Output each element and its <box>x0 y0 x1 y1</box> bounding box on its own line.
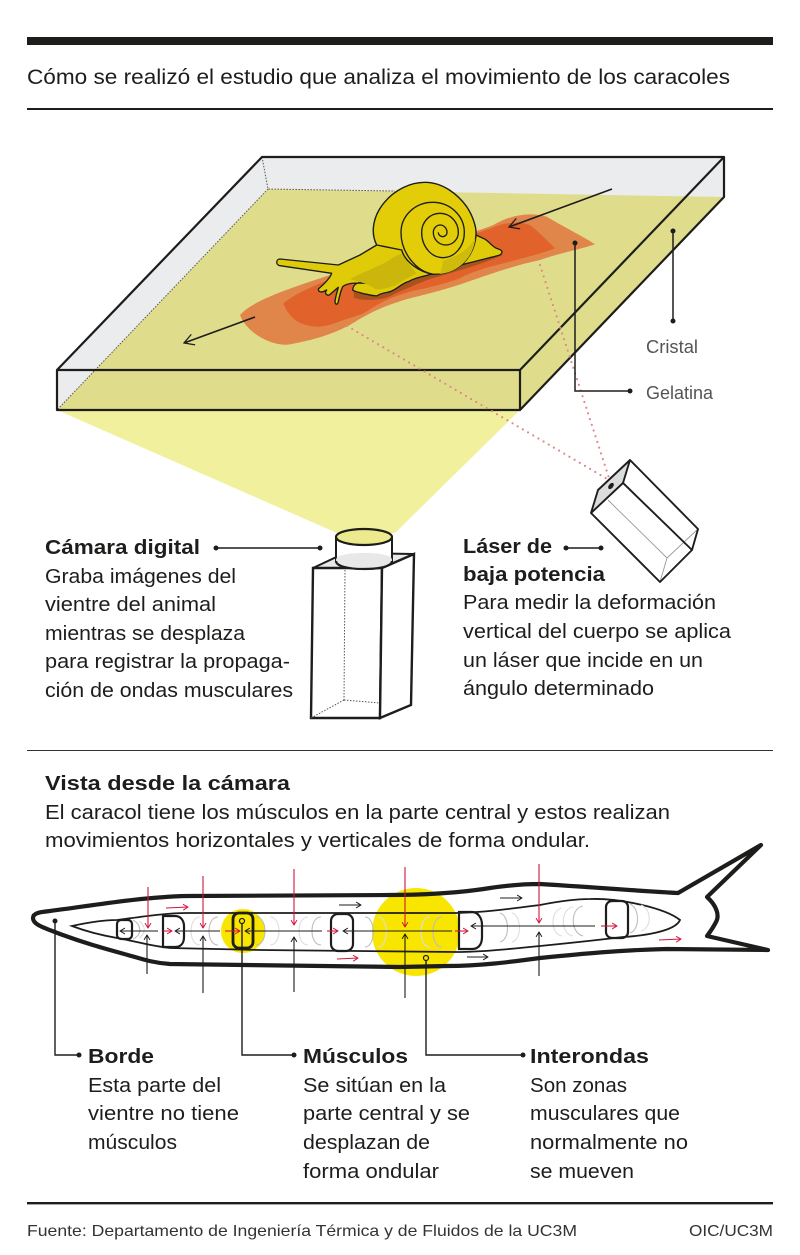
text: músculos: forma ondular <box>303 1161 439 1183</box>
label: cristal: Cristal <box>646 337 698 357</box>
shell <box>373 182 476 274</box>
icon: digital camera <box>311 529 414 718</box>
trail outer <box>240 214 595 345</box>
text: láser: ángulo determinado <box>463 678 654 700</box>
text: borde: Esta parte del <box>88 1075 221 1097</box>
text: cámara digital <box>45 537 293 702</box>
snail <box>277 182 503 304</box>
text: interondas: normalmente no <box>530 1132 688 1154</box>
leader: cristal <box>670 228 676 324</box>
text: láser: Láser de <box>463 536 552 558</box>
muscles <box>117 901 628 951</box>
glass box with gelatin <box>57 157 724 410</box>
central muscle band <box>72 899 680 952</box>
laser dotted beams <box>347 265 609 480</box>
text: láser: Para medir la deformación <box>463 592 716 614</box>
body <box>277 235 502 304</box>
leader: borde <box>52 918 82 1058</box>
leader: interondas <box>424 956 526 1058</box>
yellow highlights <box>221 888 460 976</box>
shadow under the foot <box>353 255 503 300</box>
source: Fuente: Departamento de Ingeniería Térmica y de Fluidos de la UC3M <box>27 1223 577 1240</box>
movement arrows <box>184 189 612 343</box>
heading: vista desde la cámara <box>45 773 670 852</box>
deformation trail <box>240 214 595 345</box>
leader: láser <box>564 546 604 550</box>
text: láser <box>463 536 732 700</box>
text: músculos <box>303 1046 470 1183</box>
text: láser: un láser que incide en un <box>463 650 703 672</box>
text: borde: Borde <box>88 1046 154 1068</box>
text: borde: vientre no tiene <box>88 1103 239 1125</box>
text: cámara digital: mientras se desplaza <box>45 623 246 645</box>
text: interondas: Son zonas <box>530 1075 627 1097</box>
trail inner <box>283 223 555 327</box>
text: músculos: Se sitúan en la <box>303 1075 447 1097</box>
icon: laser <box>591 460 698 582</box>
text: cámara digital: ción de ondas musculares <box>45 680 293 702</box>
title: Cómo se realizó el estudio que analiza el movimiento de los caracoles <box>27 66 730 89</box>
leader: cámara <box>214 546 322 550</box>
body outline <box>33 845 768 967</box>
ghost muscle waves, dark <box>133 904 638 947</box>
text: músculos: parte central y se <box>303 1103 470 1125</box>
heading: vista desde la cámara: movimientos horizontales y verticales de forma ondular. <box>45 830 590 852</box>
text: cámara digital: Cámara digital <box>45 537 200 559</box>
heading: vista desde la cámara: El caracol tiene los músculos en la parte central y estos realizan <box>45 802 670 824</box>
red arrows <box>148 864 681 959</box>
text: cámara digital: Graba imágenes del <box>45 566 236 588</box>
top rule <box>27 37 773 45</box>
text: cámara digital: para registrar la propaga- <box>45 651 290 673</box>
leader: gelatina <box>572 240 632 394</box>
diagram: underside of the snail <box>33 845 768 998</box>
ghost muscle waves, light <box>139 905 649 947</box>
text: borde <box>88 1046 239 1154</box>
heading: vista desde la cámara: Vista desde la cámara <box>45 773 291 795</box>
text: músculos: Músculos <box>303 1046 408 1068</box>
leader: músculos <box>240 918 296 1058</box>
light beam from camera <box>57 410 520 533</box>
text: interondas: musculares que <box>530 1103 680 1125</box>
text: láser: baja potencia <box>463 564 606 586</box>
text: cámara digital: vientre del animal <box>45 594 216 616</box>
text: interondas: se mueven <box>530 1161 634 1183</box>
text: músculos: desplazan de <box>303 1132 430 1154</box>
credit: OIC/UC3M <box>689 1223 773 1240</box>
text: láser: vertical del cuerpo se aplica <box>463 621 732 643</box>
label: gelatina: Gelatina <box>646 383 714 403</box>
black horizontal arrows <box>120 898 595 998</box>
text: interondas: Interondas <box>530 1046 649 1068</box>
text: borde: músculos <box>88 1132 177 1154</box>
text: interondas <box>530 1046 688 1183</box>
